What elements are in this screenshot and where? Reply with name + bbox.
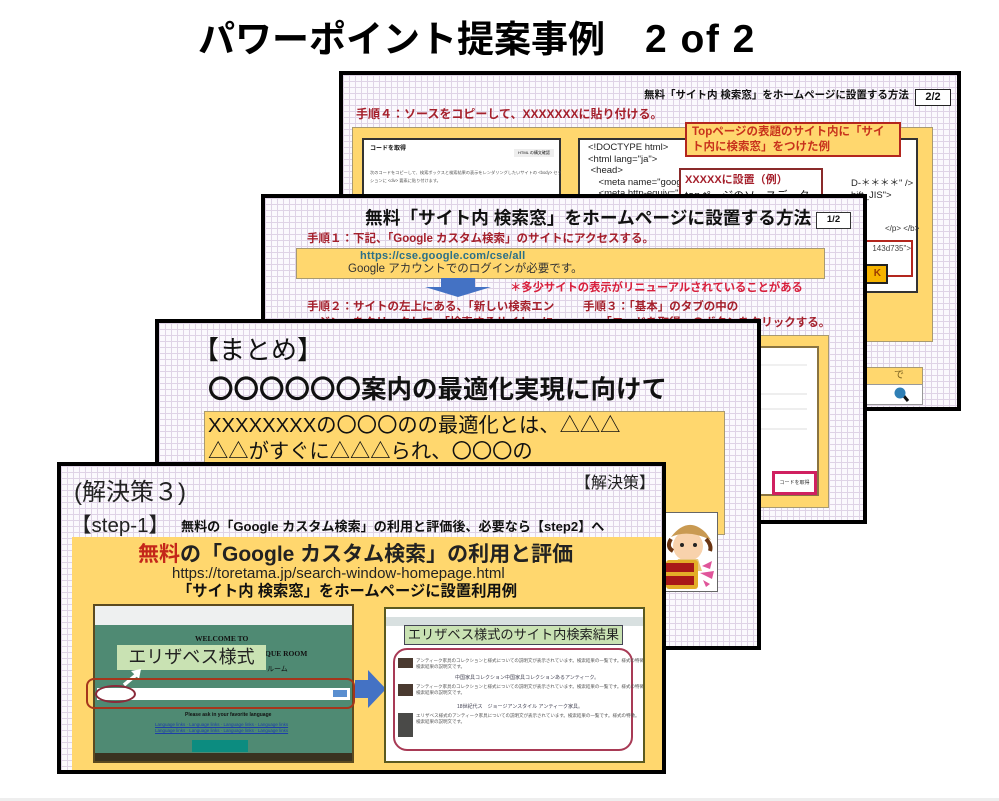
step 2: ジン」をクリックして、「検索するサイト」に (318, 317, 553, 329)
html source screenshot: <meta http-equiv=" (599, 188, 679, 199)
yellow panel (352, 127, 933, 342)
result title 2: 中国家具コレクション中国家具コレクションあるアンティーク。 (455, 675, 599, 681)
search form sample: で (894, 370, 904, 381)
red oval (95, 685, 136, 703)
slide heading: 無料「サイト内 検索窓」をホームページに設置する方法 (644, 89, 909, 101)
result text 1: 検索結果の説明文です。 (416, 664, 465, 669)
callout: example top page: ト内に検索窓」をつけた例 (692, 141, 830, 153)
orange button (853, 264, 888, 284)
teal block (192, 740, 248, 752)
results outline (393, 648, 633, 751)
slide heading: 無料「サイト内 検索窓」をホームページに設置する方法 (365, 208, 811, 228)
step description: 無料の「Google カスタム検索」の利用と評価後、必要なら【step2】へ (181, 519, 604, 534)
browser bar (386, 617, 643, 626)
bottom strip (0, 798, 999, 801)
code dialog screenshot (362, 138, 561, 278)
code dialog screenshot: 注: 注意事項までサポートが対応しないページにすると、HTML ページにはサポートされています (370, 194, 552, 199)
page heading 3: ルーム (267, 666, 288, 673)
title (198, 18, 756, 61)
language links: Language links · Language links · Language links · Language links (155, 722, 288, 727)
title: パワーポイント提案事例 (198, 19, 605, 60)
page number (915, 89, 951, 106)
code dialog screenshot: ションに <div> 要素に貼り付けます。 (370, 178, 441, 183)
red highlight around search bar (86, 678, 355, 709)
callout: example top page (685, 122, 901, 157)
result text 1: アンティーク家具のコレクションと様式についての説明文が表示されています。検索結果の一覧です。様式の特徴。 (416, 658, 645, 663)
language links (155, 722, 288, 734)
panel: solution 3 slide (57, 462, 666, 774)
step 1: 手順１：下記、「Google カスタム検索」のサイトにアクセスする。 (307, 233, 654, 245)
step 2: 手順２：サイトの左上にある、「新しい検索エン (307, 301, 554, 313)
yellow summary box (204, 411, 725, 535)
code dialog screenshot: 次のコードをコピーして、検索ボックスと検索結果の表示をレンダリングしたいサイトの <body> セク (370, 170, 562, 175)
result text 2 (416, 684, 645, 695)
page number (816, 212, 851, 229)
yellow summary box: △△がすぐに△△△られ、〇〇〇の (208, 441, 533, 463)
title: 2 of 2 (645, 18, 756, 61)
panel: slide 2 of 2 source code (339, 71, 961, 411)
result text 2: 検索結果の説明文です。 (416, 690, 465, 695)
code dialog screenshot: HTML の構文確認 (518, 150, 550, 155)
page number: 1/2 (827, 214, 840, 225)
taskbar (95, 753, 352, 761)
white dialog (670, 346, 819, 496)
result thumbnail 2 (398, 684, 413, 696)
code dialog screenshot: です。<!DOCTYPE html> を使用することをおすすめします。 (370, 202, 485, 207)
result text 3: 検索結果の説明文です。 (416, 719, 465, 724)
example heading: 「サイト内 検索窓」をホームページに設置利用例 (177, 583, 517, 600)
result text 2: アンティーク家具のコレクションと様式についての説明文が表示されています。検索結果の一覧です。様式の特徴。 (416, 684, 645, 689)
page number: 2/2 (925, 91, 941, 103)
highlighted get-code button (772, 471, 817, 495)
arrow: white pointer (122, 669, 141, 686)
callout: xxxxx example: XXXXXに設置（例） (685, 174, 788, 186)
panel: slide 1 of 2 access steps (261, 194, 867, 524)
main heading: 無料の「Google カスタム検索」の利用と評価 (138, 543, 573, 566)
search field (97, 688, 350, 700)
solution title: (解決策３) (74, 479, 186, 506)
icon: magnifier (894, 388, 910, 402)
summary heading: 【まとめ】 (193, 335, 323, 365)
step 4 heading: 手順４：ソースをコピーして、XXXXXXXに貼り付ける。 (356, 107, 662, 121)
URL bar: Google アカウントでのログインが必要です。 (348, 263, 583, 275)
arrow: right (355, 670, 384, 708)
label: search results: エリザベス様式のサイト内検索結果 (408, 627, 619, 642)
URL: https://toretama.jp/search-window-homepage.html (172, 565, 505, 582)
browser bar (95, 606, 352, 625)
code dialog screenshot: コードを取得 (370, 146, 406, 152)
html source screenshot: <html lang="ja"> (588, 154, 657, 164)
search form sample (833, 367, 923, 385)
summary subtitle: 〇〇〇〇〇〇案内の最適化実現に向けて (208, 376, 667, 404)
step 3: 手順３：「基本」のタブの中の (583, 301, 738, 313)
label: elizabeth style (117, 645, 266, 670)
html source screenshot: hift_JIS"> (851, 190, 892, 200)
result text 3: エリザベス様式のアンティーク家具についての説明文が表示されています。検索結果の一覧です。様式の特徴。 (416, 713, 639, 718)
URL bar: https://cse.google.com/cse/all (360, 250, 526, 262)
callout: xxxxx example: topページのソースデータ (685, 190, 810, 202)
callout: example top page: Topページの表題のサイト内に「サイ (692, 126, 884, 138)
URL bar (296, 248, 825, 279)
html source screenshot: D-＊＊＊＊" /> (851, 178, 913, 189)
html source screenshot: </p> </b> (885, 224, 919, 233)
left screenshot (93, 604, 354, 763)
result text 1 (416, 658, 645, 669)
search box (833, 384, 923, 405)
search button (333, 690, 347, 697)
yellow panel (665, 335, 829, 508)
html source screenshot: <head> (591, 165, 623, 176)
highlighted get-code button: コードを取得 (779, 480, 810, 486)
highlighted code box: 143d735"> (872, 244, 911, 253)
page heading 2: QUE ROOM (265, 649, 307, 658)
html source screenshot: <meta name="google (599, 176, 689, 188)
label: elizabeth style: エリザベス様式 (128, 647, 255, 667)
step 3: 「コードを取得」のボタンをクリックする。 (606, 317, 830, 329)
yellow summary box: XXXXXXXXの〇〇〇のの最適化とは、△△△ (208, 415, 620, 437)
callout: xxxxx example (679, 168, 823, 218)
html source screenshot (578, 138, 918, 293)
red note: ＊多少サイトの表示がリニューアルされていることがある (510, 282, 803, 294)
result thumbnail 3 (398, 713, 413, 737)
highlighted code box (863, 240, 913, 277)
step 2 (307, 300, 554, 329)
result thumbnail 1 (398, 658, 413, 668)
orange button: K (874, 268, 881, 279)
language links: Language links · Language links · Language links · Language links (155, 728, 288, 733)
language prompt: Please ask in your favorite language (185, 712, 271, 718)
right screenshot (384, 607, 645, 763)
illustration: explorer with treasure chest (665, 512, 718, 592)
panel: summary slide (155, 319, 761, 650)
step 3 (583, 300, 830, 329)
step label: 【step-1】 (71, 514, 169, 537)
yellow main panel (72, 537, 662, 772)
page heading: WELCOME TO (195, 634, 248, 643)
solution tag: 【解決策】 (575, 475, 655, 492)
html source screenshot: <!DOCTYPE html> (588, 142, 668, 153)
arrow: down (425, 278, 491, 297)
result title 3: 18世紀代ス ジョージアンスタイル アンティーク家具。 (457, 704, 583, 710)
result text 3 (416, 712, 639, 724)
